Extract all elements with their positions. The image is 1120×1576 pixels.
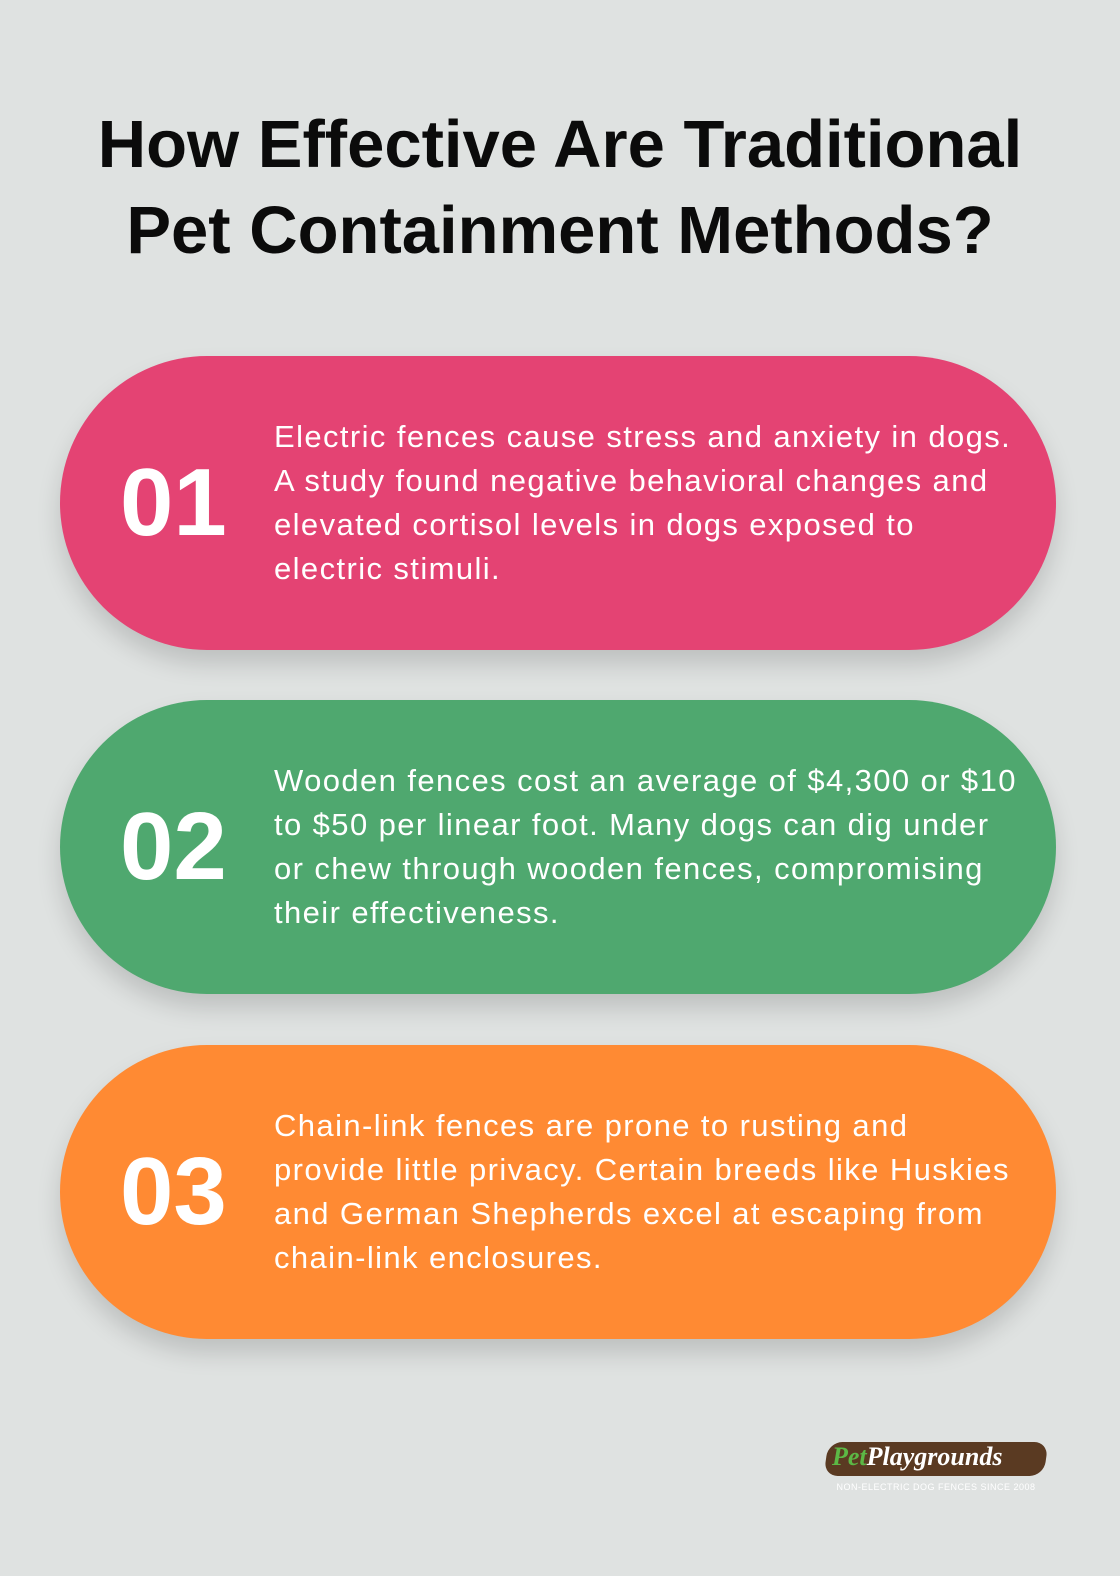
text 01: A study found negative behavioral changes and <box>274 463 988 498</box>
logo: NON-ELECTRIC DOG FENCES SINCE 2008 <box>836 1482 1036 1492</box>
text 03: and German Shepherds excel at escaping from <box>274 1196 984 1231</box>
title: How Effective Are Traditional <box>98 107 1022 182</box>
text 01: electric stimuli. <box>274 551 501 586</box>
text 01: Electric fences cause stress and anxiety in dogs. <box>274 419 1011 454</box>
text 02 <box>274 763 1017 930</box>
text 02: to $50 per linear foot. Many dogs can dig under <box>274 807 990 842</box>
number 01: 01 <box>120 449 227 556</box>
text 01: elevated cortisol levels in dogs exposed to <box>274 507 915 542</box>
text 03 <box>274 1108 1010 1275</box>
title: Pet Containment Methods? <box>126 193 994 268</box>
text 02: Wooden fences cost an average of $4,300 or $10 <box>274 763 1017 798</box>
logo: PetPlaygrounds <box>832 1442 1002 1471</box>
title <box>98 107 1022 268</box>
panel: 03 chain-link fences <box>60 1045 1056 1339</box>
text 02: or chew through wooden fences, compromising <box>274 851 984 886</box>
text 01 <box>274 419 1011 586</box>
panel: 02 wooden fences <box>60 700 1056 994</box>
logo <box>825 1442 1047 1492</box>
text 02: their effectiveness. <box>274 895 560 930</box>
number 03: 03 <box>120 1138 227 1245</box>
text 03: Chain-link fences are prone to rusting and <box>274 1108 908 1143</box>
text 03: chain-link enclosures. <box>274 1240 603 1275</box>
panel: 01 electric fences <box>60 356 1056 650</box>
number 02: 02 <box>120 793 227 900</box>
text 03: provide little privacy. Certain breeds like Huskies <box>274 1152 1010 1187</box>
